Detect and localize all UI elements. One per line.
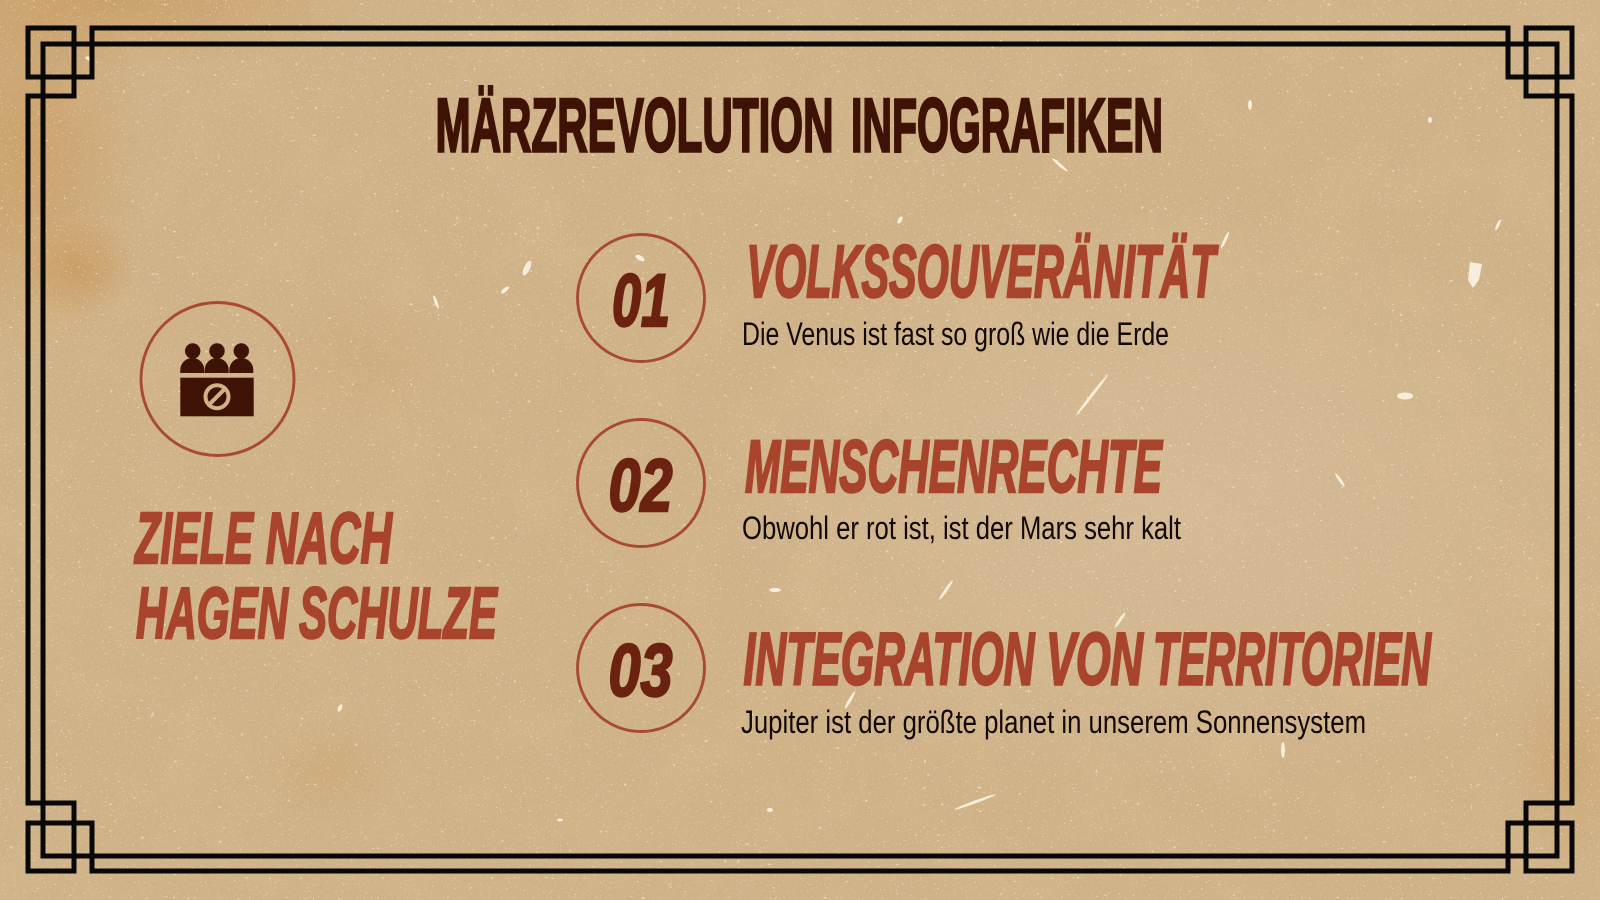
number badge 01: 01	[612, 259, 670, 342]
item 01	[578, 230, 1219, 362]
description 02: Obwohl er rot ist, ist der Mars sehr kalt	[742, 510, 1181, 546]
heading: goals	[134, 499, 498, 654]
heading: goals: HAGEN	[136, 574, 289, 654]
heading: Integration von Territorien: VON	[1046, 618, 1144, 700]
heading: goals: SCHULZE	[299, 574, 498, 654]
icon: people behind a prohibited ballot box	[141, 302, 294, 456]
description 01: Die Venus ist fast so groß wie die Erde	[742, 316, 1169, 352]
number badge 03	[578, 604, 704, 732]
number badge 02: 02	[608, 444, 672, 527]
heading: goals: ZIELE	[134, 499, 254, 579]
panel: left goal summary	[134, 302, 498, 654]
number badge 02	[578, 420, 704, 546]
number badge 01	[578, 234, 704, 362]
white scratches and specks	[85, 55, 1502, 821]
number badge 03: 03	[608, 629, 672, 712]
heading: Menschenrechte: MENSCHENRECHTE	[745, 425, 1164, 508]
heading: Integration von Territorien: INTEGRATION	[744, 618, 1035, 700]
description 03: Jupiter ist der größte planet in unserem Sonnensystem	[741, 704, 1366, 740]
title: MÄRZREVOLUTION	[436, 84, 834, 169]
item 03	[578, 604, 1432, 740]
item 02	[578, 420, 1181, 546]
title: INFOGRAFIKEN	[851, 84, 1163, 169]
heading: goals: NACH	[266, 499, 393, 579]
heading: Volkssouveränität: VOLKSSOUVERÄNITÄT	[746, 230, 1219, 313]
